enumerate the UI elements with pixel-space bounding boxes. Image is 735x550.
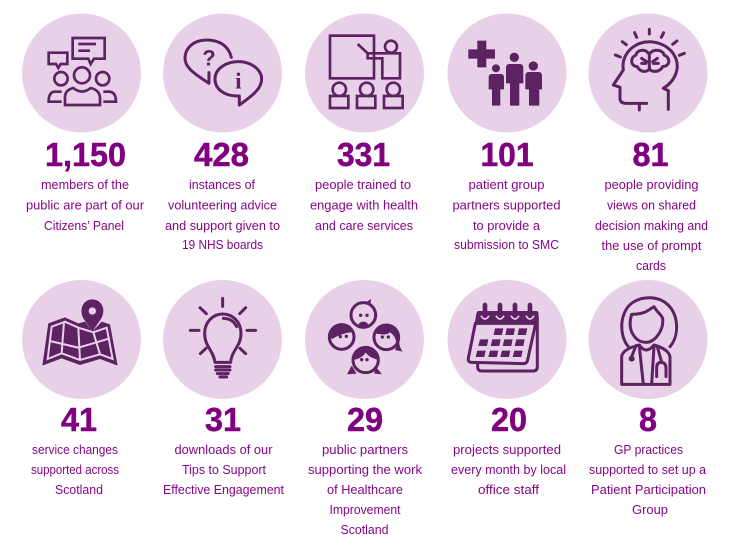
panel: public partners xyxy=(305,280,424,537)
description: members of the xyxy=(41,177,129,192)
icon: calendar xyxy=(468,305,539,371)
icon: four faces xyxy=(329,299,403,374)
description: Effective Engagement xyxy=(163,482,284,497)
circle xyxy=(448,14,566,132)
panel: volunteering advice xyxy=(163,14,282,252)
description xyxy=(31,442,119,497)
description: Group xyxy=(632,502,668,517)
panel: GP practices xyxy=(588,280,708,517)
icon: head with brain and rays xyxy=(613,29,684,110)
description: supported across xyxy=(31,462,119,477)
description: service changes xyxy=(32,442,118,457)
description: supporting the work xyxy=(308,462,423,477)
number: 1,150 xyxy=(45,136,126,173)
number: 31 xyxy=(205,401,241,438)
panel: people trained xyxy=(305,14,424,233)
circle xyxy=(305,280,424,399)
description: decision making and xyxy=(595,218,708,233)
description: cards xyxy=(636,258,666,273)
description xyxy=(163,442,284,497)
number: 81 xyxy=(632,136,668,173)
number: 331 xyxy=(337,136,390,173)
description xyxy=(452,177,560,252)
icon: question and info speech bubbles: ? xyxy=(202,46,216,71)
description: submission to SMC xyxy=(454,237,559,252)
panel: patient group partners xyxy=(448,14,566,252)
circle xyxy=(305,14,424,132)
icon: folded map with pin xyxy=(42,299,118,366)
description: Scotland xyxy=(55,482,103,497)
description: patient group xyxy=(468,177,544,192)
circle xyxy=(448,280,566,399)
circle xyxy=(163,14,282,132)
description xyxy=(595,177,708,273)
icon: trainer at a board with students xyxy=(330,36,403,108)
number: 8 xyxy=(639,401,657,438)
number: 41 xyxy=(61,401,97,438)
panel: citizens panel xyxy=(22,14,145,233)
icon: doctor with stethoscope xyxy=(622,298,677,384)
description xyxy=(310,177,418,233)
description xyxy=(589,442,707,517)
description: people trained to xyxy=(315,177,411,192)
description: engage with health xyxy=(310,198,418,212)
circle xyxy=(163,280,282,399)
number: 29 xyxy=(347,401,383,438)
description: public are part of our xyxy=(26,198,145,212)
panel: downloads xyxy=(163,280,284,497)
description: office staff xyxy=(478,482,539,497)
description: GP practices xyxy=(614,442,683,457)
description: views on shared xyxy=(607,198,696,212)
icon: medical cross and three people xyxy=(468,41,542,106)
description: of Healthcare xyxy=(327,482,403,497)
description: volunteering advice xyxy=(168,198,277,212)
circle xyxy=(22,14,141,132)
description: people providing xyxy=(604,177,698,192)
description: supported to set up a xyxy=(589,462,707,477)
description xyxy=(451,442,566,497)
icon: question and info speech bubbles xyxy=(185,40,262,105)
number: 101 xyxy=(480,136,534,173)
panel: projects supported xyxy=(448,280,566,497)
description: Citizens’ Panel xyxy=(44,218,124,233)
description: 19 NHS boards xyxy=(182,237,263,252)
description: Scotland xyxy=(340,522,388,537)
description xyxy=(165,177,280,252)
description: Patient Participation xyxy=(591,482,706,497)
panel: shared decision making xyxy=(588,14,708,273)
circle xyxy=(588,280,708,399)
description: the use of prompt xyxy=(602,238,702,253)
description xyxy=(308,442,423,537)
description: partners supported xyxy=(452,198,560,212)
description: projects supported xyxy=(453,442,561,457)
description: downloads of our xyxy=(174,442,273,457)
description: and care services xyxy=(315,218,413,233)
description: to provide a xyxy=(473,218,541,233)
description: Tips to Support xyxy=(182,462,266,477)
icon: lightbulb xyxy=(190,298,256,377)
description: public partners xyxy=(322,442,408,457)
circle xyxy=(22,280,141,399)
panel: service changes xyxy=(22,280,141,497)
description: Improvement xyxy=(330,502,401,517)
description: instances of xyxy=(189,177,255,192)
description: and support given to xyxy=(165,218,280,233)
icon: group with speech bubbles xyxy=(49,38,116,105)
number: 20 xyxy=(491,401,527,438)
description: every month by local xyxy=(451,462,566,477)
icon: question and info speech bubbles: i xyxy=(235,68,242,94)
circle xyxy=(588,14,708,132)
description xyxy=(26,177,145,233)
number: 428 xyxy=(194,136,249,173)
